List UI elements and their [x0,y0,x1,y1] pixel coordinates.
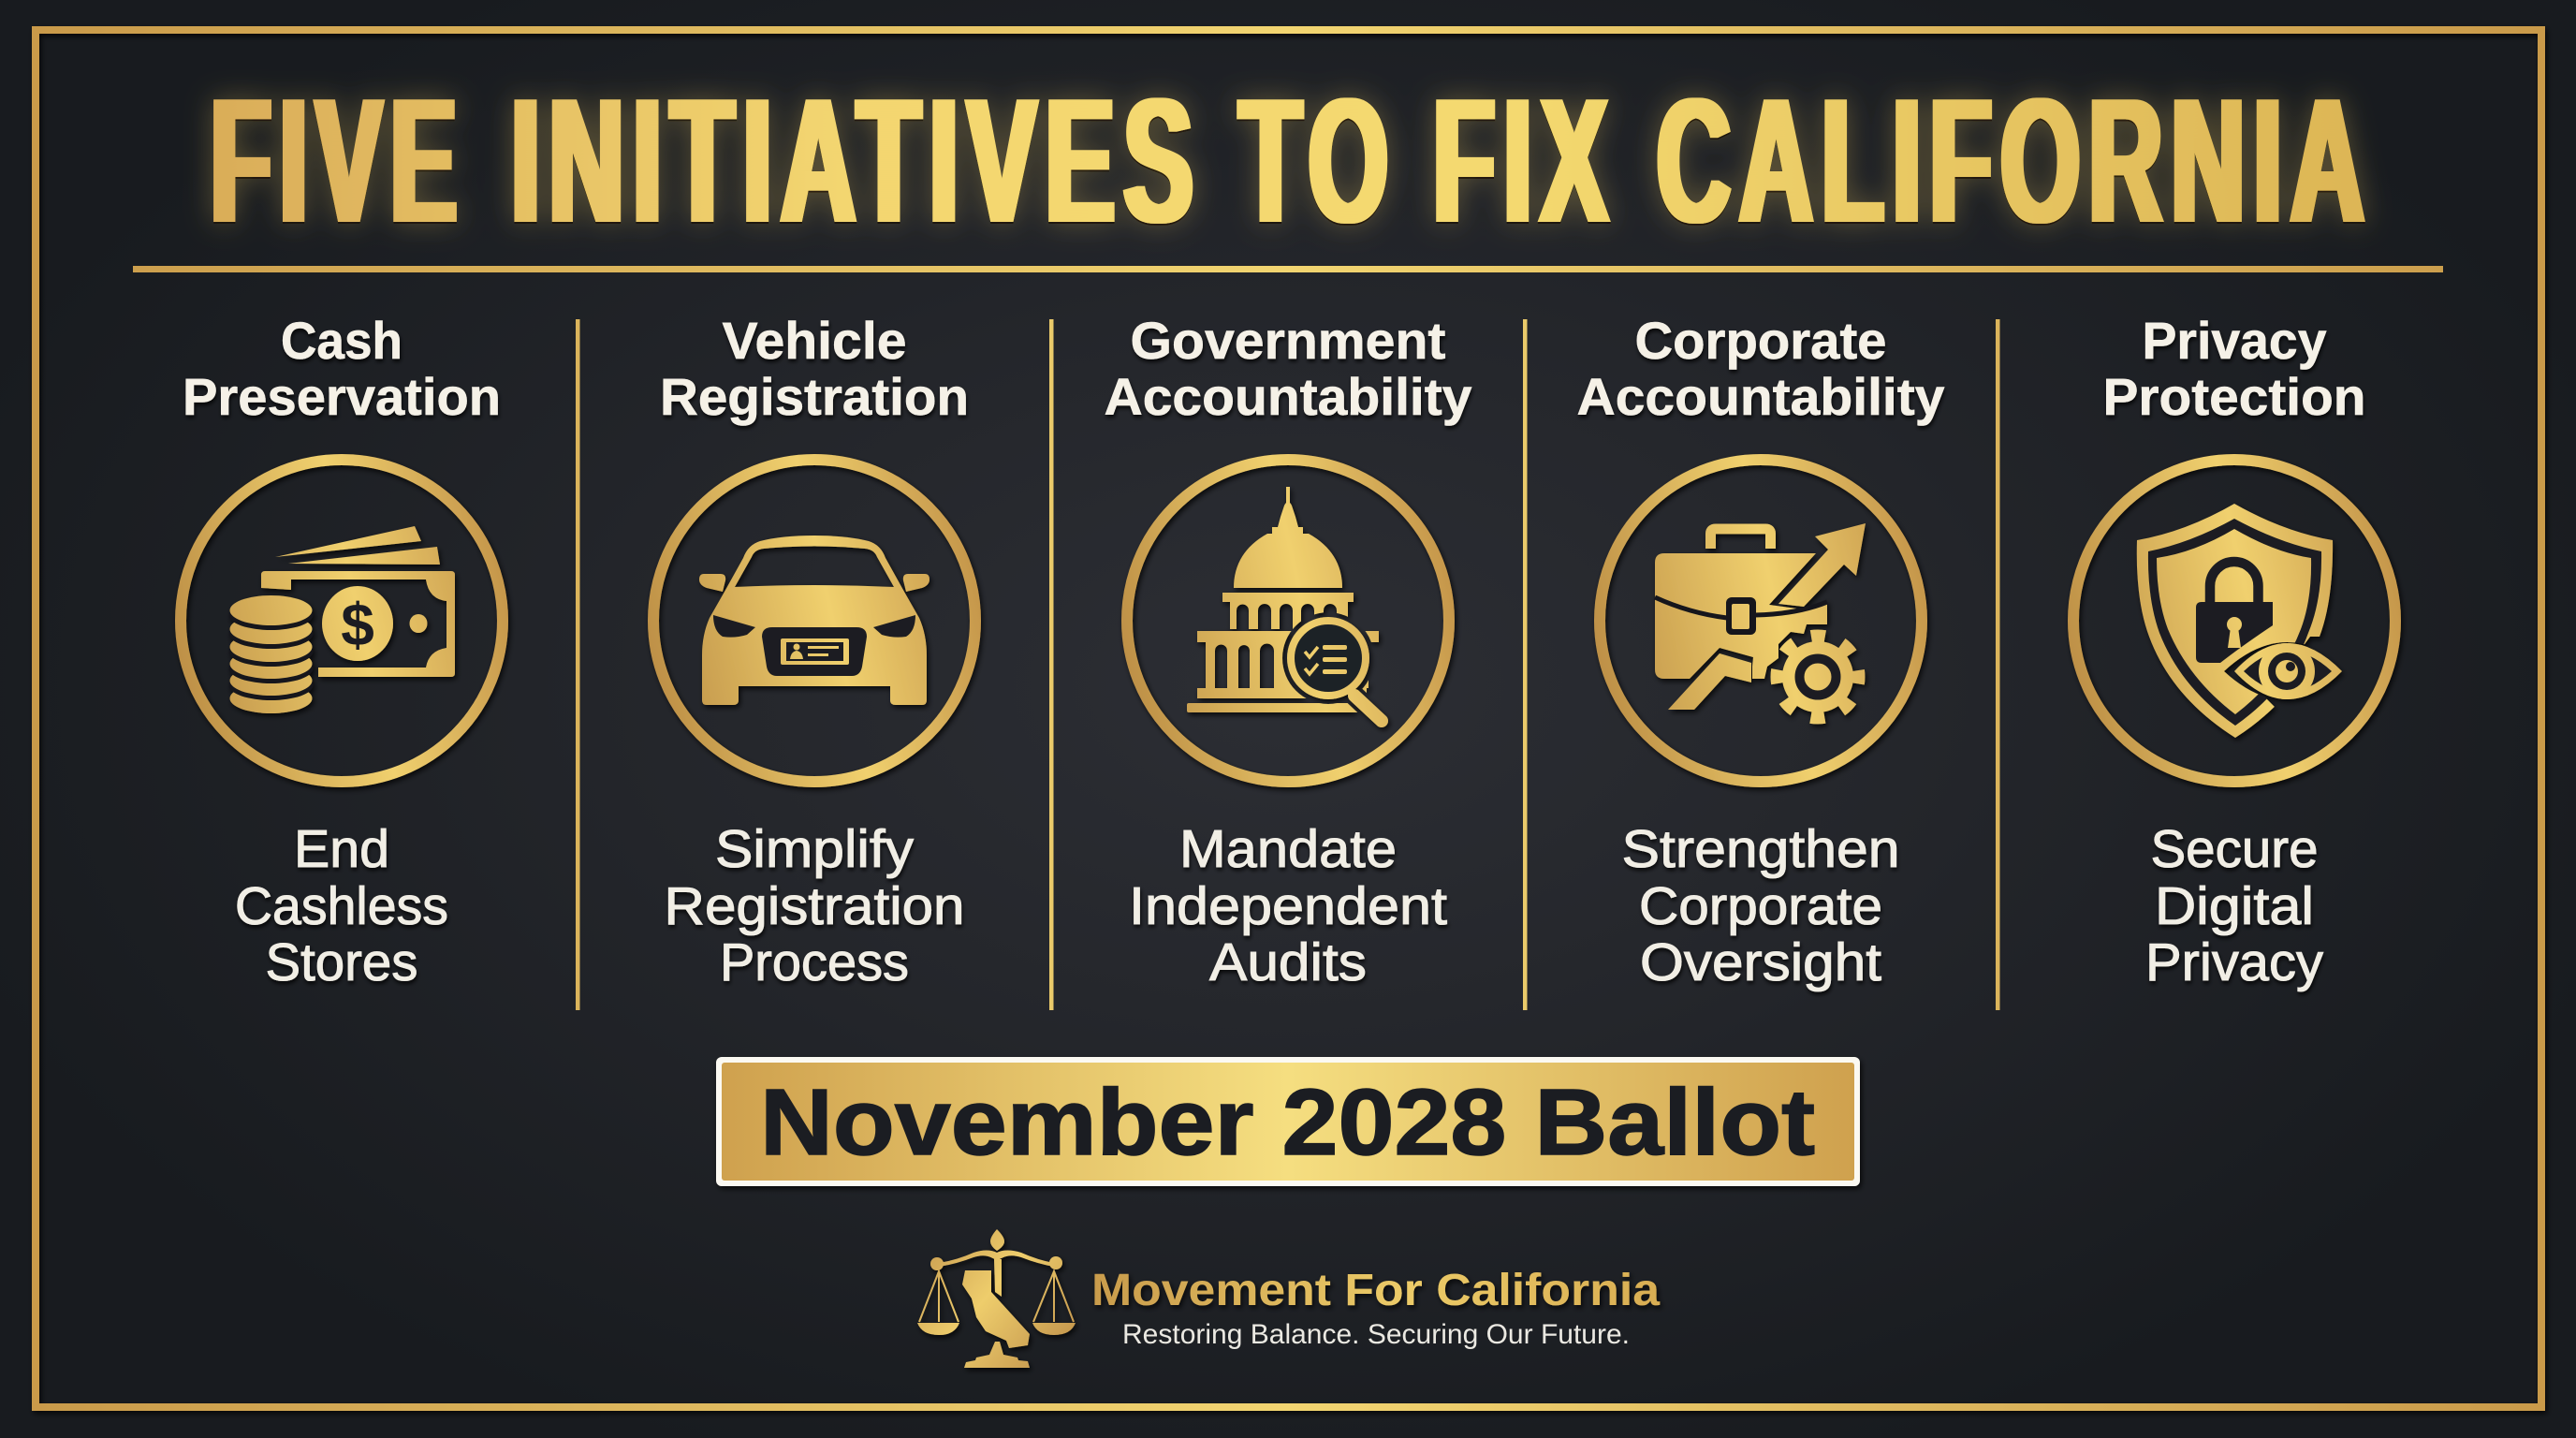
column dividers [576,319,1999,1010]
organisation name: Movement For California [1091,1266,1660,1315]
heading: Government Accountability: Government [1131,311,1445,370]
icon: capitol with magnifier [1127,460,1449,782]
action text: End Cashless Stores [235,819,448,992]
ballot banner: November 2028 Ballot [760,1070,1815,1175]
action text: End Cashless Stores: Cashless [235,876,448,936]
action text: Strengthen Corporate Oversight: Oversight [1640,932,1881,992]
title: FIVE [211,62,465,260]
panel: Vehicle Registration [653,311,975,992]
action text: Secure Digital Privacy: Privacy [2145,932,2323,992]
heading: Vehicle Registration: Registration [660,367,969,426]
heading: Cash Preservation: Cash [281,311,402,370]
heading: Vehicle Registration: Vehicle [723,311,906,370]
icon: briefcase, arrow and gear [1600,460,1922,782]
heading: Corporate Accountability: Corporate [1634,311,1887,370]
action text: Strengthen Corporate Oversight [1621,819,1900,992]
action text: End Cashless Stores: End [294,819,389,879]
title: INITIATIVES [511,62,1202,260]
panel: Corporate Accountability [1576,311,1945,992]
action text: Secure Digital Privacy [2145,819,2323,992]
icon: cash and coins: $ [341,591,374,658]
action text: Mandate Independent Audits: Independent [1129,876,1447,936]
heading: Privacy Protection [2102,311,2366,426]
action text: Mandate Independent Audits: Audits [1209,932,1367,992]
action text: Secure Digital Privacy: Digital [2155,876,2314,936]
action text: Secure Digital Privacy: Secure [2151,819,2318,879]
title divider [133,266,2443,272]
panel: Government Accountability [1105,311,1471,992]
action text: Simplify Registration Process: Registration [665,876,964,936]
icon: shield with lock and eye [2073,460,2395,782]
title: TO [1239,62,1397,260]
action text: Strengthen Corporate Oversight: Strengthen [1621,819,1900,879]
heading: Cash Preservation [183,311,501,426]
heading: Cash Preservation: Preservation [183,367,501,426]
icon: car with registration card [653,460,975,782]
heading: Vehicle Registration [660,311,969,426]
ballot banner [716,1057,1860,1186]
panel: Privacy Protection [2073,311,2395,992]
action text: Simplify Registration Process: Simplify [715,819,915,879]
icon: cash and coins [181,460,503,782]
panel: Cash Preservation [181,311,503,992]
heading: Corporate Accountability: Accountability [1576,367,1945,426]
heading: Privacy Protection: Protection [2102,367,2366,426]
action text: Simplify Registration Process: Process [720,932,909,992]
heading: Government Accountability [1105,311,1471,426]
heading: Corporate Accountability [1576,311,1945,426]
action text: End Cashless Stores: Stores [266,932,417,992]
title [211,62,2373,260]
heading: Government Accountability: Accountability [1105,367,1471,426]
tagline: Restoring Balance. Securing Our Future. [1122,1319,1630,1350]
action text: Mandate Independent Audits: Mandate [1179,819,1397,879]
action text: Mandate Independent Audits [1129,819,1447,992]
heading: Privacy Protection: Privacy [2142,311,2327,370]
action text: Simplify Registration Process [665,819,964,992]
title: FIX [1433,62,1617,260]
action text: Strengthen Corporate Oversight: Corporate [1639,876,1882,936]
logo: scales of justice with California [917,1229,1076,1368]
